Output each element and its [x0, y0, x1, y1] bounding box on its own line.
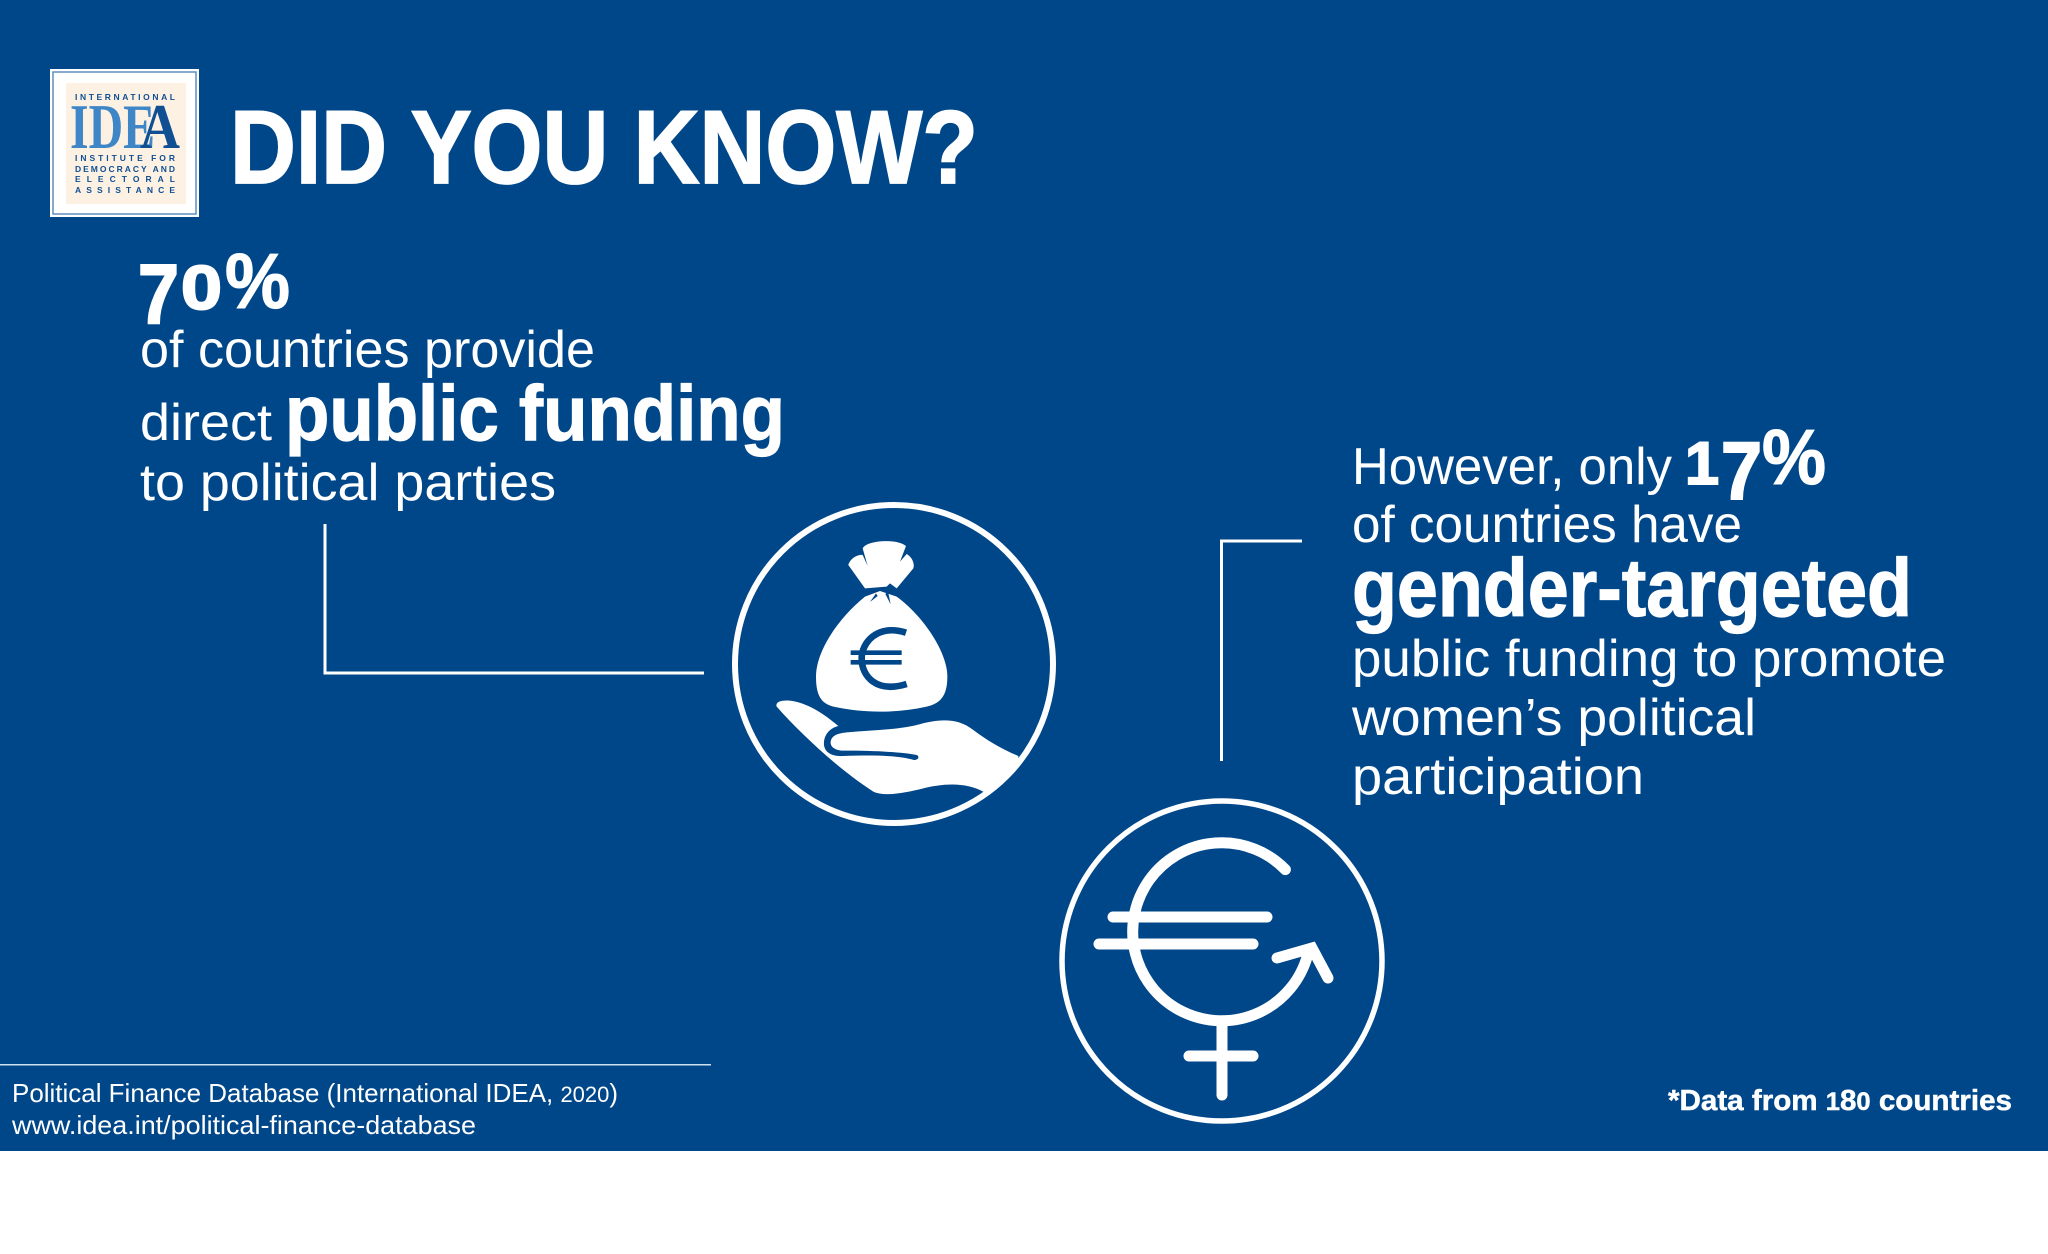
text block: 70% public funding	[138, 237, 785, 512]
logo: International IDEA: ASSISTANCE	[75, 185, 175, 195]
text block: 17% gender-targeted: %	[1762, 413, 1826, 501]
logo: International IDEA	[50, 69, 199, 217]
logo: International IDEA: IDE	[70, 91, 155, 162]
text block: 70% public funding: 7	[138, 247, 179, 341]
text block: 17% gender-targeted: 7	[1721, 426, 1762, 517]
text block: 17% gender-targeted: 1	[1685, 430, 1719, 497]
connector: left text to money icon	[325, 524, 704, 673]
footer rule	[0, 1064, 711, 1066]
text block: 70% public funding: to political parties	[140, 454, 556, 512]
text block: 17% gender-targeted: gender-targeted	[1352, 543, 1912, 634]
text block: 17% gender-targeted: public funding to promote	[1352, 630, 1946, 688]
text block: 17% gender-targeted: of countries have	[1352, 496, 1742, 554]
text block: 70% public funding: of countries provide	[140, 321, 595, 379]
source note: www.idea.int/political-finance-database	[11, 1110, 476, 1140]
logo: International IDEA: INTERNATIONAL	[75, 92, 175, 102]
icon: euro and gender symbol	[1062, 801, 1382, 1121]
source note: Political Finance Database (International IDEA, 2020)	[12, 1078, 618, 1108]
text block: 70% public funding: public funding	[285, 369, 785, 457]
text block: 70% public funding: 0	[181, 254, 222, 323]
text block: 17% gender-targeted	[1351, 413, 1946, 806]
text block: 70% public funding: direct	[140, 394, 273, 452]
text block: 70% public funding: %	[225, 237, 290, 325]
icon: hand holding euro money bag	[735, 505, 1053, 823]
logo: International IDEA: DEMOCRACY AND	[75, 164, 175, 174]
connector: right text to gender icon	[1222, 541, 1302, 761]
text block: 17% gender-targeted: However, only	[1352, 438, 1672, 496]
data footnote: *Data from 180 countries	[1668, 1085, 2012, 1117]
text block: 17% gender-targeted: participation	[1352, 748, 1644, 806]
source note	[11, 1078, 618, 1140]
logo: International IDEA: ELECTORAL	[75, 174, 175, 184]
text block: 17% gender-targeted: women’s political	[1351, 689, 1756, 747]
logo: International IDEA: INSTITUTE FOR	[75, 153, 175, 163]
logo: International IDEA: A	[140, 91, 180, 162]
title: DID YOU KNOW?	[230, 90, 978, 206]
